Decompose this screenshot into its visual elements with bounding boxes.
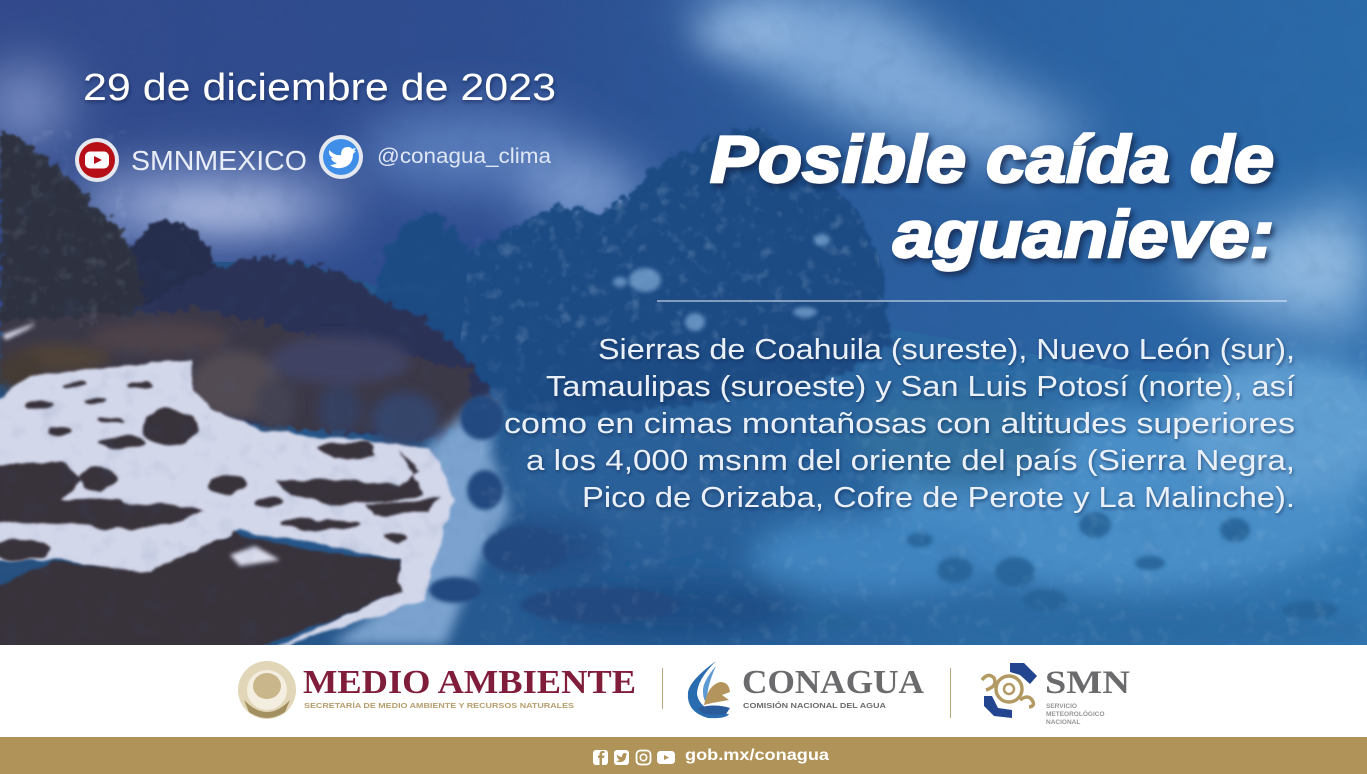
twitter handle: @conagua_clima <box>377 145 551 168</box>
snow on rocks <box>2 323 280 566</box>
brush clumps <box>0 322 439 448</box>
stream of snow in blue tone <box>330 395 510 645</box>
logo: Conagua: CONAGUA <box>742 664 924 701</box>
icon: twitter <box>319 135 363 179</box>
logo: Conagua <box>688 661 924 718</box>
right snowy slope <box>490 355 1367 652</box>
mountain texture <box>0 130 130 330</box>
clouds <box>0 0 1367 340</box>
blue-tinted rocks <box>426 394 636 619</box>
snow <box>0 360 455 650</box>
tree highlights <box>460 120 900 350</box>
logo: Conagua: COMISIÓN NACIONAL DEL AGUA <box>743 701 887 710</box>
body text: a los 4,000 msnm del oriente del país (Sierra Negra, <box>526 445 1295 477</box>
white logo band <box>0 645 1367 737</box>
body text: Sierras de Coahuila (sureste), Nuevo León (sur), <box>598 334 1295 366</box>
photo texture <box>480 340 1367 645</box>
ground <box>0 262 1367 645</box>
water and beaver mark <box>688 661 730 718</box>
logo: SMN: NACIONAL <box>1046 719 1080 726</box>
dark rocks on snow <box>0 382 440 650</box>
body text <box>504 334 1295 514</box>
body text: Pico de Orizaba, Cofre de Perote y La Malinche). <box>582 482 1295 514</box>
logo: Medio Ambiente <box>238 661 636 719</box>
title <box>710 122 1274 271</box>
footer url: gob.mx/conagua <box>685 747 829 764</box>
date: 29 de diciembre de 2023 <box>83 67 556 109</box>
footer social icons <box>593 750 675 765</box>
trees <box>125 125 895 420</box>
title: aguanieve: <box>893 197 1274 271</box>
logo: SMN: METEOROLÓGICO <box>1046 709 1104 718</box>
body text: como en cimas montañosas con altitudes superiores <box>504 408 1295 440</box>
title: Posible caída de <box>710 122 1274 196</box>
logo: Medio Ambiente: MEDIO AMBIENTE <box>303 664 636 701</box>
shrubs on right slope <box>906 510 1338 619</box>
gold footer band <box>0 737 1367 774</box>
emblem seal <box>238 661 296 719</box>
logo: SMN: SERVICIO <box>1046 703 1077 710</box>
logo: SMN <box>982 663 1130 726</box>
icon: youtube <box>75 138 119 182</box>
spiral gear mark <box>982 663 1037 718</box>
logo: SMN: SMN <box>1045 665 1130 701</box>
left rocky mountain <box>0 132 500 440</box>
body text: Tamaulipas (suroeste) y San Luis Potosí (norte), así <box>546 371 1295 403</box>
logo: Medio Ambiente: SECRETARÍA DE MEDIO AMBIENTE Y RECURSOS NATURALES <box>304 701 574 710</box>
youtube handle: SMNMEXICO <box>131 145 307 176</box>
